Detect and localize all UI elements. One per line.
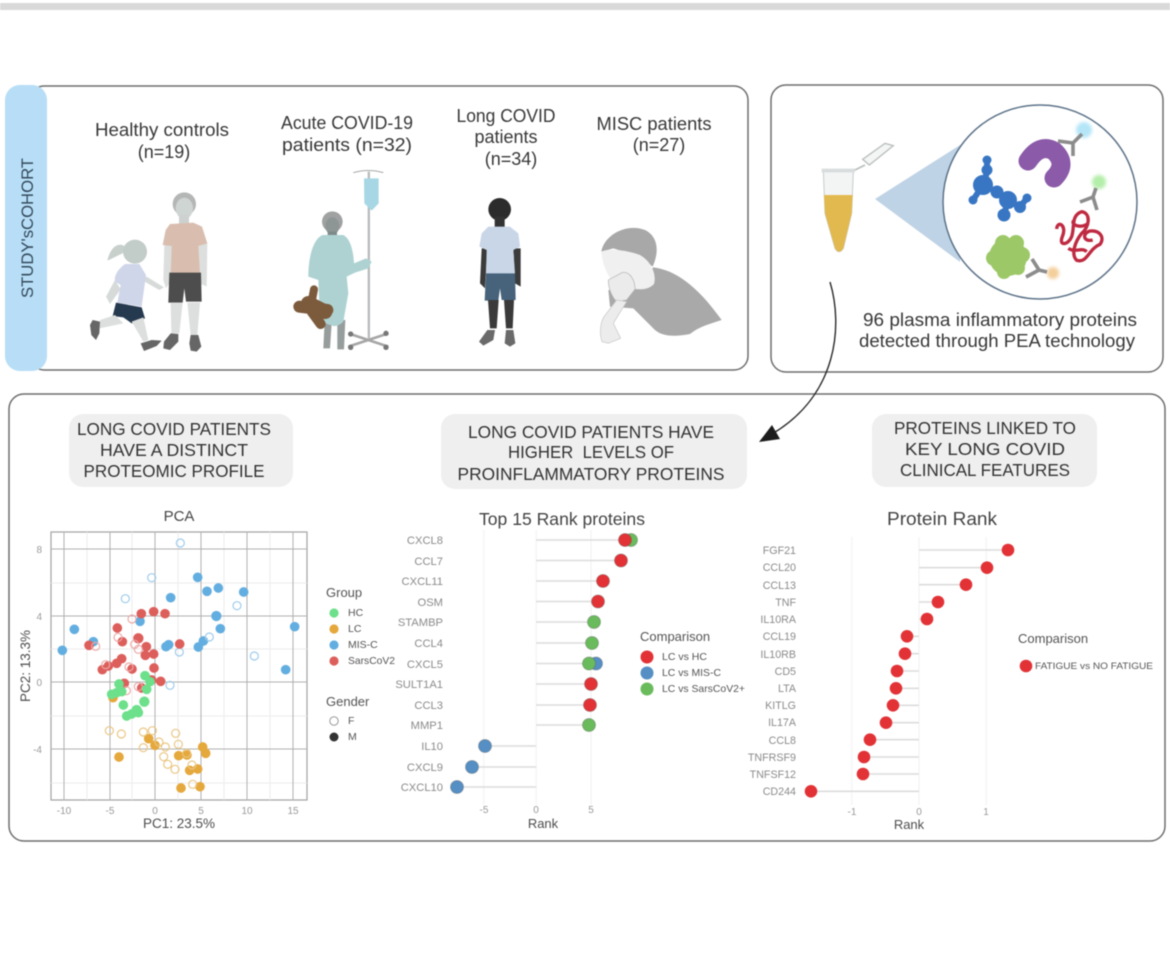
legend: fatigue comparison — [1018, 631, 1153, 672]
heading: healthy controls: (n=19) — [138, 142, 190, 162]
heading: acute covid: patients (n=32) — [282, 135, 412, 155]
chart: PCA scatter: -4 — [33, 745, 42, 756]
chart: top 15 rank proteins — [395, 509, 645, 831]
chart: top 15 rank proteins: 0 — [533, 805, 539, 816]
text: plasma description — [859, 310, 1137, 351]
icon: plasma tube — [822, 143, 893, 252]
heading: higher levels: HIGHER LEVELS OF — [508, 442, 674, 462]
legend: PCA group and gender: F — [348, 715, 354, 727]
icon: red protein — [1057, 212, 1102, 261]
chart: protein rank: IL10RA — [760, 614, 797, 626]
legend: PCA group and gender: SarsCoV2 — [348, 655, 395, 667]
points: MIS-C — [58, 573, 299, 674]
chart: protein rank: FGF21 — [763, 545, 796, 557]
heading: long covid — [456, 106, 556, 169]
chart: PCA scatter: 10 — [241, 806, 253, 817]
chart: PCA scatter — [18, 508, 307, 831]
chart: protein rank: LTA — [778, 683, 797, 695]
chart: protein rank: CCL13 — [763, 580, 796, 592]
heading: clinical features: KEY LONG COVID — [905, 439, 1065, 459]
chart: protein rank: KITLG — [765, 700, 796, 712]
chart: top 15 rank proteins: CXCL9 — [407, 762, 443, 774]
chart: top 15 rank proteins: OSM — [418, 597, 443, 609]
chart: top 15 rank proteins: MMP1 — [411, 720, 443, 732]
chart: protein rank — [748, 509, 1014, 832]
chart: PCA scatter: -5 — [106, 806, 115, 817]
icon: antibody green — [1080, 175, 1106, 210]
legend: comparison: LC vs HC — [662, 651, 707, 663]
chart: PCA scatter: 5 — [198, 806, 204, 817]
chart: protein rank: -1 — [848, 807, 857, 818]
chart: PCA scatter: 8 — [36, 545, 42, 556]
chart: top 15 rank proteins: CCL7 — [414, 556, 443, 568]
heading: misc — [596, 114, 712, 155]
chart: PCA scatter: PCA — [164, 508, 194, 525]
legend: fatigue comparison: FATIGUE vs NO FATIGUE — [1035, 661, 1153, 672]
icon: protein circle — [943, 105, 1137, 299]
legend: PCA group and gender: M — [348, 731, 357, 743]
panel: study cohort — [5, 85, 748, 371]
arrow: plasma to results — [759, 282, 836, 442]
text: plasma description: 96 plasma inflammatory proteins — [863, 310, 1137, 330]
heading: distinct profile: HAVE A DISTINCT — [100, 440, 248, 460]
heading: healthy controls: Healthy controls — [95, 120, 229, 140]
chart: top 15 rank proteins: IL10 — [421, 741, 443, 753]
chart: protein rank: CD244 — [763, 786, 796, 798]
chart: protein rank: CD5 — [775, 666, 796, 678]
icon: coughing child — [600, 228, 722, 343]
chart: top 15 rank proteins: Top 15 Rank proteins — [479, 509, 645, 529]
chart: PCA scatter: 4 — [36, 612, 42, 623]
cohort side tab — [5, 85, 47, 371]
heading: distinct profile — [69, 414, 293, 487]
chart: PCA scatter: PC1: 23.5% — [143, 816, 215, 831]
chart: top 15 rank proteins: STAMBP — [398, 617, 443, 629]
chart: top 15 rank proteins: CXCL8 — [407, 535, 443, 547]
chart: protein rank: CCL20 — [763, 562, 796, 574]
icon: green protein — [986, 235, 1030, 279]
heading: higher levels — [441, 414, 747, 489]
lollipop points — [805, 544, 1014, 798]
chart: PCA scatter: -10 — [57, 806, 72, 817]
heading: acute covid — [281, 113, 413, 155]
legend: comparison: LC vs SarsCoV2+ — [662, 683, 745, 695]
legend: fatigue comparison: Comparison — [1018, 631, 1088, 646]
heading: long covid: (n=34) — [485, 149, 537, 169]
chart: top 15 rank proteins: CXCL5 — [407, 659, 443, 671]
chart: protein rank: Protein Rank — [887, 509, 998, 529]
heading: higher levels: LONG COVID PATIENTS HAVE — [468, 422, 714, 442]
heading: distinct profile: LONG COVID PATIENTS — [77, 419, 271, 439]
heading: higher levels: PROINFLAMMATORY PROTEINS — [458, 464, 724, 484]
legend: PCA group and gender: MIS-C — [348, 639, 378, 651]
icon: antibody orange — [1026, 259, 1059, 279]
chart: protein rank: 0 — [916, 807, 922, 818]
chart: protein rank: IL17A — [768, 717, 797, 729]
legend: comparison: Comparison — [640, 629, 710, 644]
icon: long covid child — [479, 198, 521, 347]
text: plasma description: detected through PEA technology — [859, 331, 1135, 351]
chart: top 15 rank proteins: CXCL11 — [402, 576, 443, 588]
points: red — [85, 608, 184, 692]
chart: top 15 rank proteins: Rank — [528, 816, 559, 831]
zoom cone — [875, 140, 968, 262]
chart: PCA scatter: 0 — [152, 806, 158, 817]
chart: protein rank: 1 — [983, 807, 989, 818]
heading: acute covid: Acute COVID-19 — [281, 113, 413, 133]
legend: PCA group and gender — [326, 585, 395, 743]
chart: protein rank: TNFRSF9 — [748, 752, 796, 764]
heading: clinical features: PROTEINS LINKED TO — [894, 418, 1076, 438]
legend: PCA group and gender: HC — [348, 607, 364, 619]
icon: healthy children — [90, 192, 207, 352]
chart: protein rank: TNFSF12 — [750, 769, 796, 781]
points: green — [108, 672, 154, 720]
heading: long covid: Long COVID — [456, 106, 556, 126]
heading: clinical features: CLINICAL FEATURES — [900, 460, 1070, 480]
icon: blue protein — [969, 156, 1031, 221]
heading: long covid: patients — [474, 127, 538, 147]
heading: clinical features — [872, 414, 1097, 487]
chart: top 15 rank proteins: CCL3 — [414, 700, 443, 712]
legend: PCA group and gender: LC — [348, 623, 362, 635]
panel: plasma proteins — [771, 85, 1163, 372]
chart: protein rank: TNF — [775, 597, 796, 609]
legend: PCA group and gender: Group — [326, 585, 362, 600]
lollipop points — [450, 534, 638, 794]
chart: top 15 rank proteins: CCL4 — [414, 638, 443, 650]
chart: top 15 rank proteins: -5 — [480, 805, 489, 816]
chart: PCA scatter: 0 — [36, 678, 42, 689]
chart: top 15 rank proteins: CXCL10 — [401, 782, 443, 794]
cohort side tab: STUDY'sCOHORT — [18, 158, 37, 298]
heading: misc: MISC patients — [596, 114, 712, 134]
icon: acute patient with IV — [299, 170, 389, 350]
icon: purple protein — [1028, 149, 1061, 178]
panel: results — [9, 394, 1165, 841]
chart: PCA scatter: PC2: 13.3% — [18, 630, 33, 702]
heading: healthy controls — [95, 120, 229, 162]
chart: top 15 rank proteins: 5 — [588, 805, 594, 816]
chart: protein rank: CCL19 — [763, 631, 796, 643]
icon: antibody blue — [1058, 122, 1092, 156]
legend: PCA group and gender: Gender — [326, 694, 370, 709]
chart: top 15 rank proteins: SULT1A1 — [395, 679, 443, 691]
legend: comparison: LC vs MIS-C — [662, 667, 721, 679]
chart: protein rank: Rank — [894, 817, 925, 832]
chart: protein rank: CCL8 — [769, 735, 796, 747]
chart: protein rank: IL10RB — [760, 649, 796, 661]
legend: comparison — [640, 629, 745, 696]
chart: PCA scatter: 15 — [287, 806, 299, 817]
heading: distinct profile: PROTEOMIC PROFILE — [84, 461, 264, 481]
heading: misc: (n=27) — [633, 135, 685, 155]
points: orange — [109, 694, 210, 792]
